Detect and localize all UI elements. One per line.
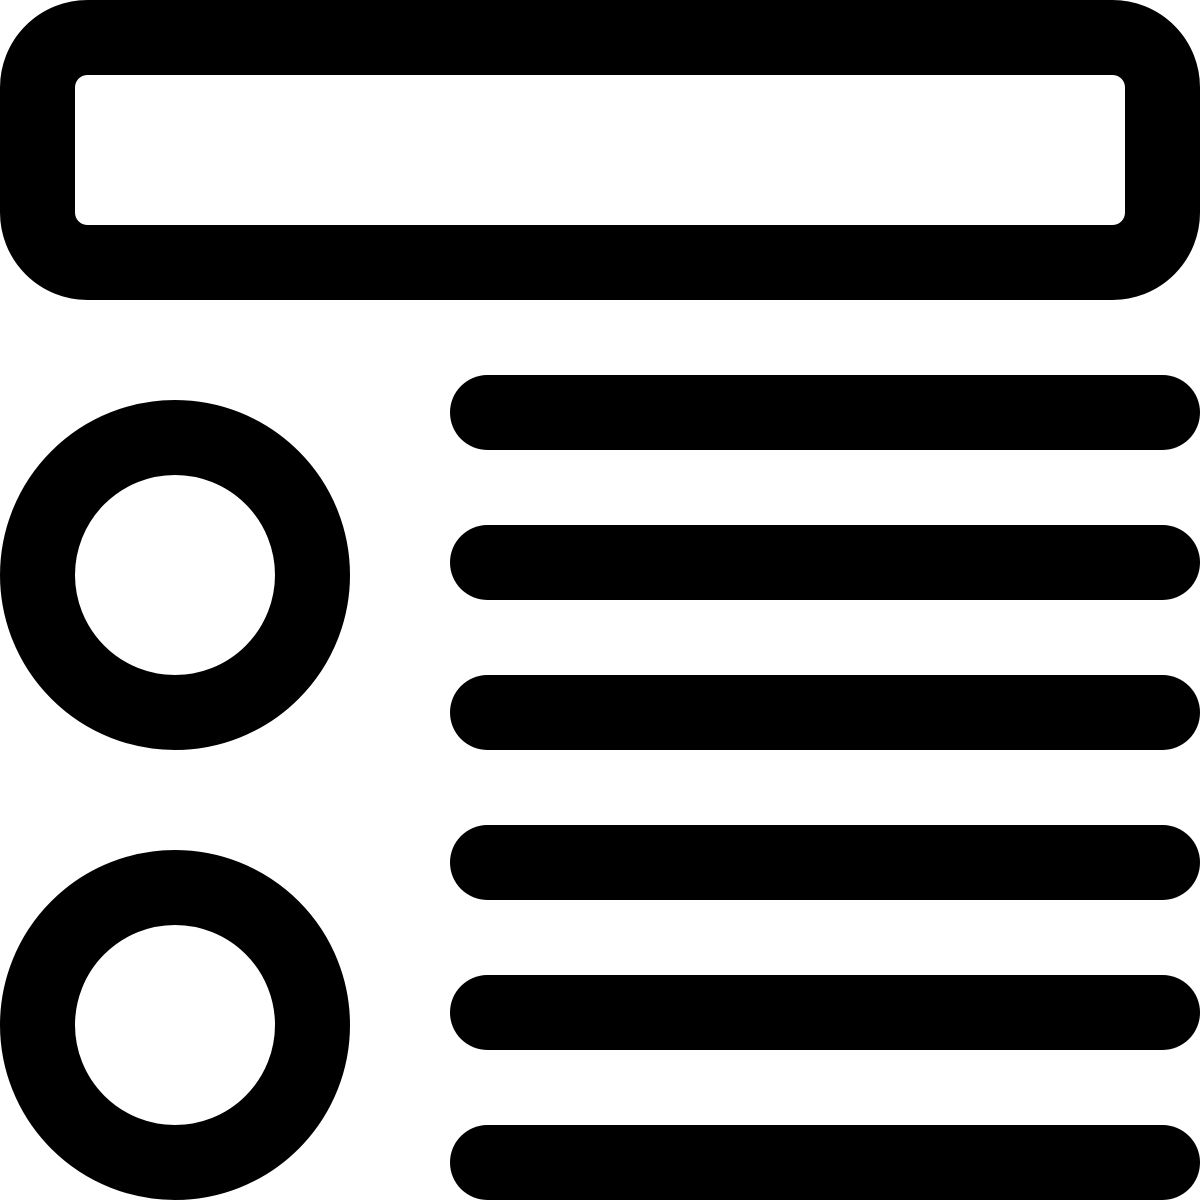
header box [38,38,1162,262]
circle bullet 1 [38,438,312,712]
text lines [488,412,1162,1162]
circle bullet 2 [38,888,312,1162]
